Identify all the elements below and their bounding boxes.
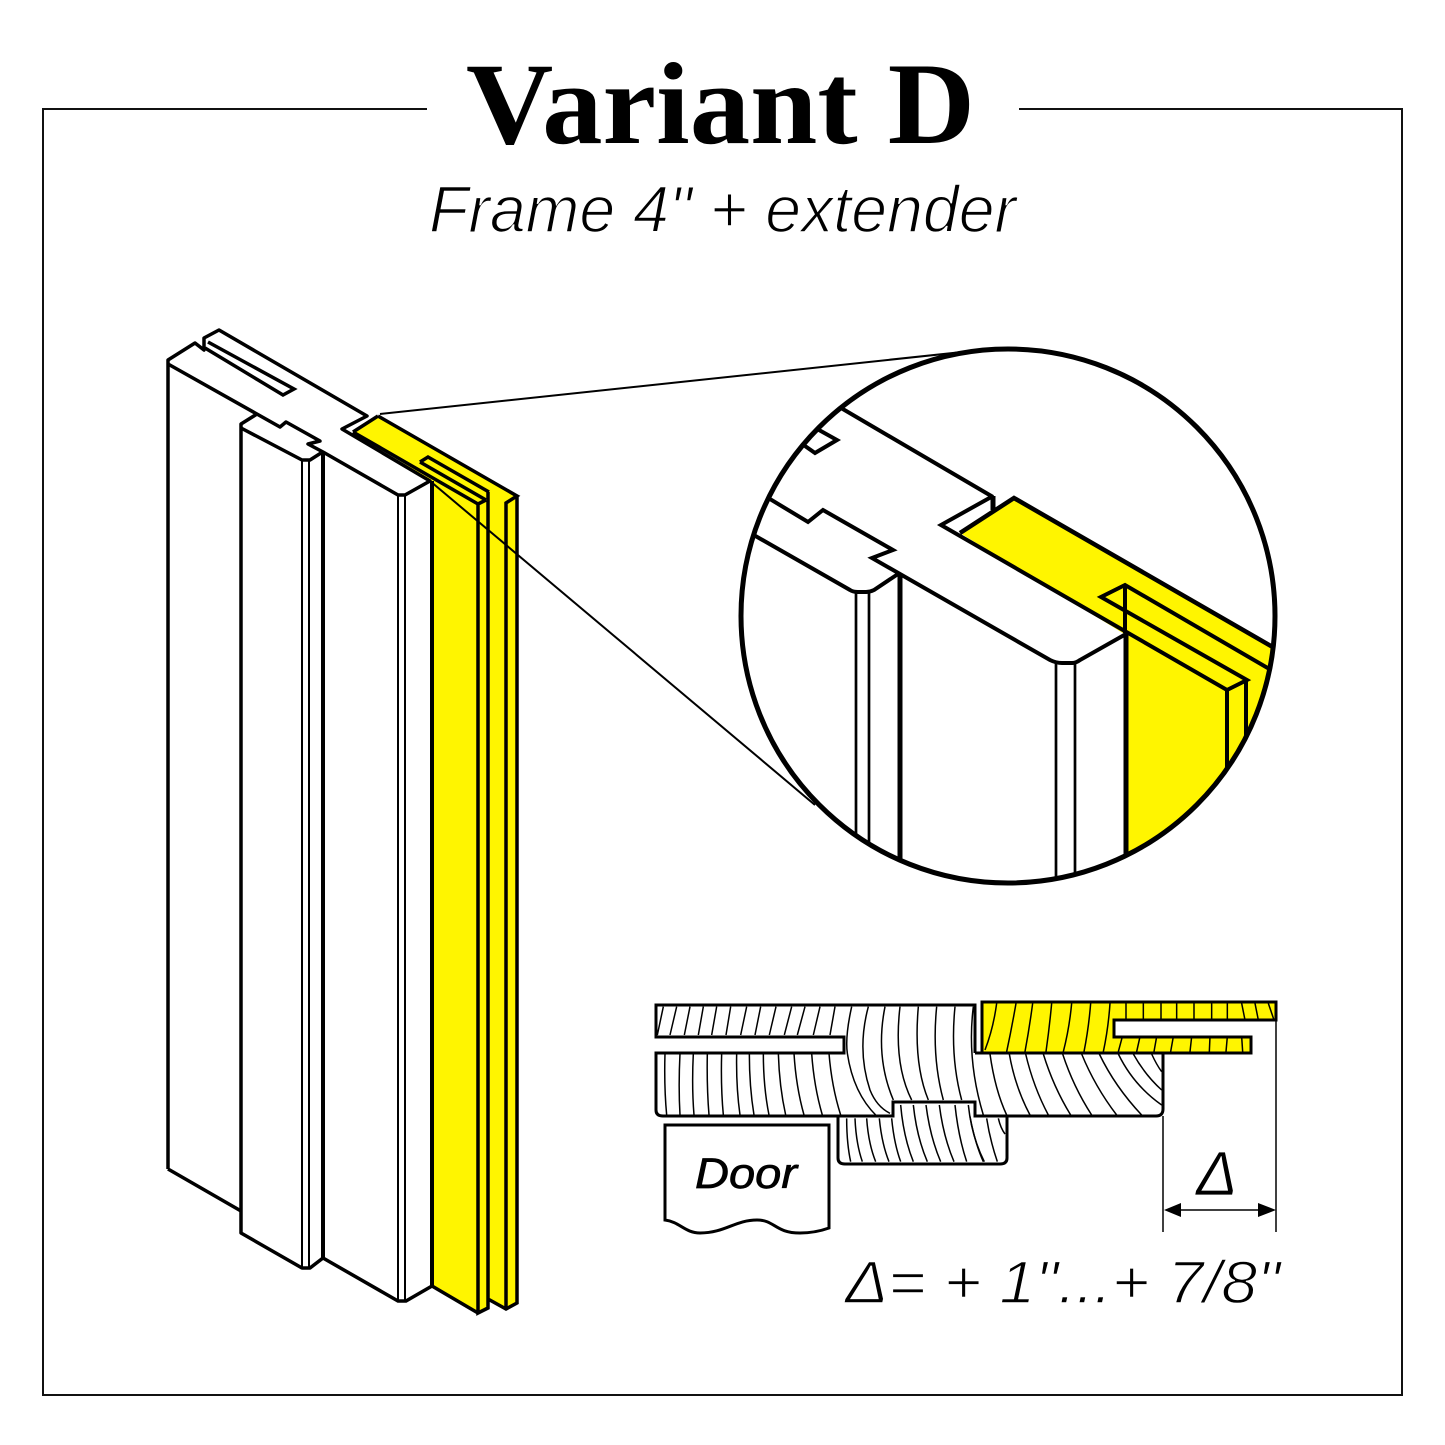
door label: Door — [695, 1150, 799, 1198]
dimension extension lines — [1163, 1020, 1276, 1232]
dimension arrow — [1164, 1203, 1276, 1217]
section diagram — [656, 1002, 1283, 1316]
yellow extender section — [982, 1002, 1276, 1053]
wood grain right — [970, 1003, 1274, 1162]
magnified detail — [755, 408, 1272, 876]
thin groove lines — [302, 460, 405, 1301]
door — [665, 1125, 829, 1233]
title: Variant D — [466, 40, 975, 169]
yellow extender — [353, 416, 517, 1313]
callout leader lines — [380, 348, 1000, 805]
door frame isometric drawing — [168, 330, 517, 1313]
stop strip — [241, 414, 323, 1268]
wood grain left — [657, 1007, 984, 1162]
frame section outline — [656, 1005, 1163, 1116]
subtitle: Frame 4" + extender — [429, 172, 1019, 246]
main frame top and front — [168, 330, 430, 1211]
magnifier circle — [741, 349, 1290, 900]
extender outlines — [353, 416, 517, 1313]
stop section outline — [838, 1117, 1007, 1164]
delta symbol: Δ — [1194, 1140, 1238, 1209]
delta formula: Δ= + 1"...+ 7/8" — [843, 1249, 1283, 1316]
casing body — [323, 1258, 432, 1301]
